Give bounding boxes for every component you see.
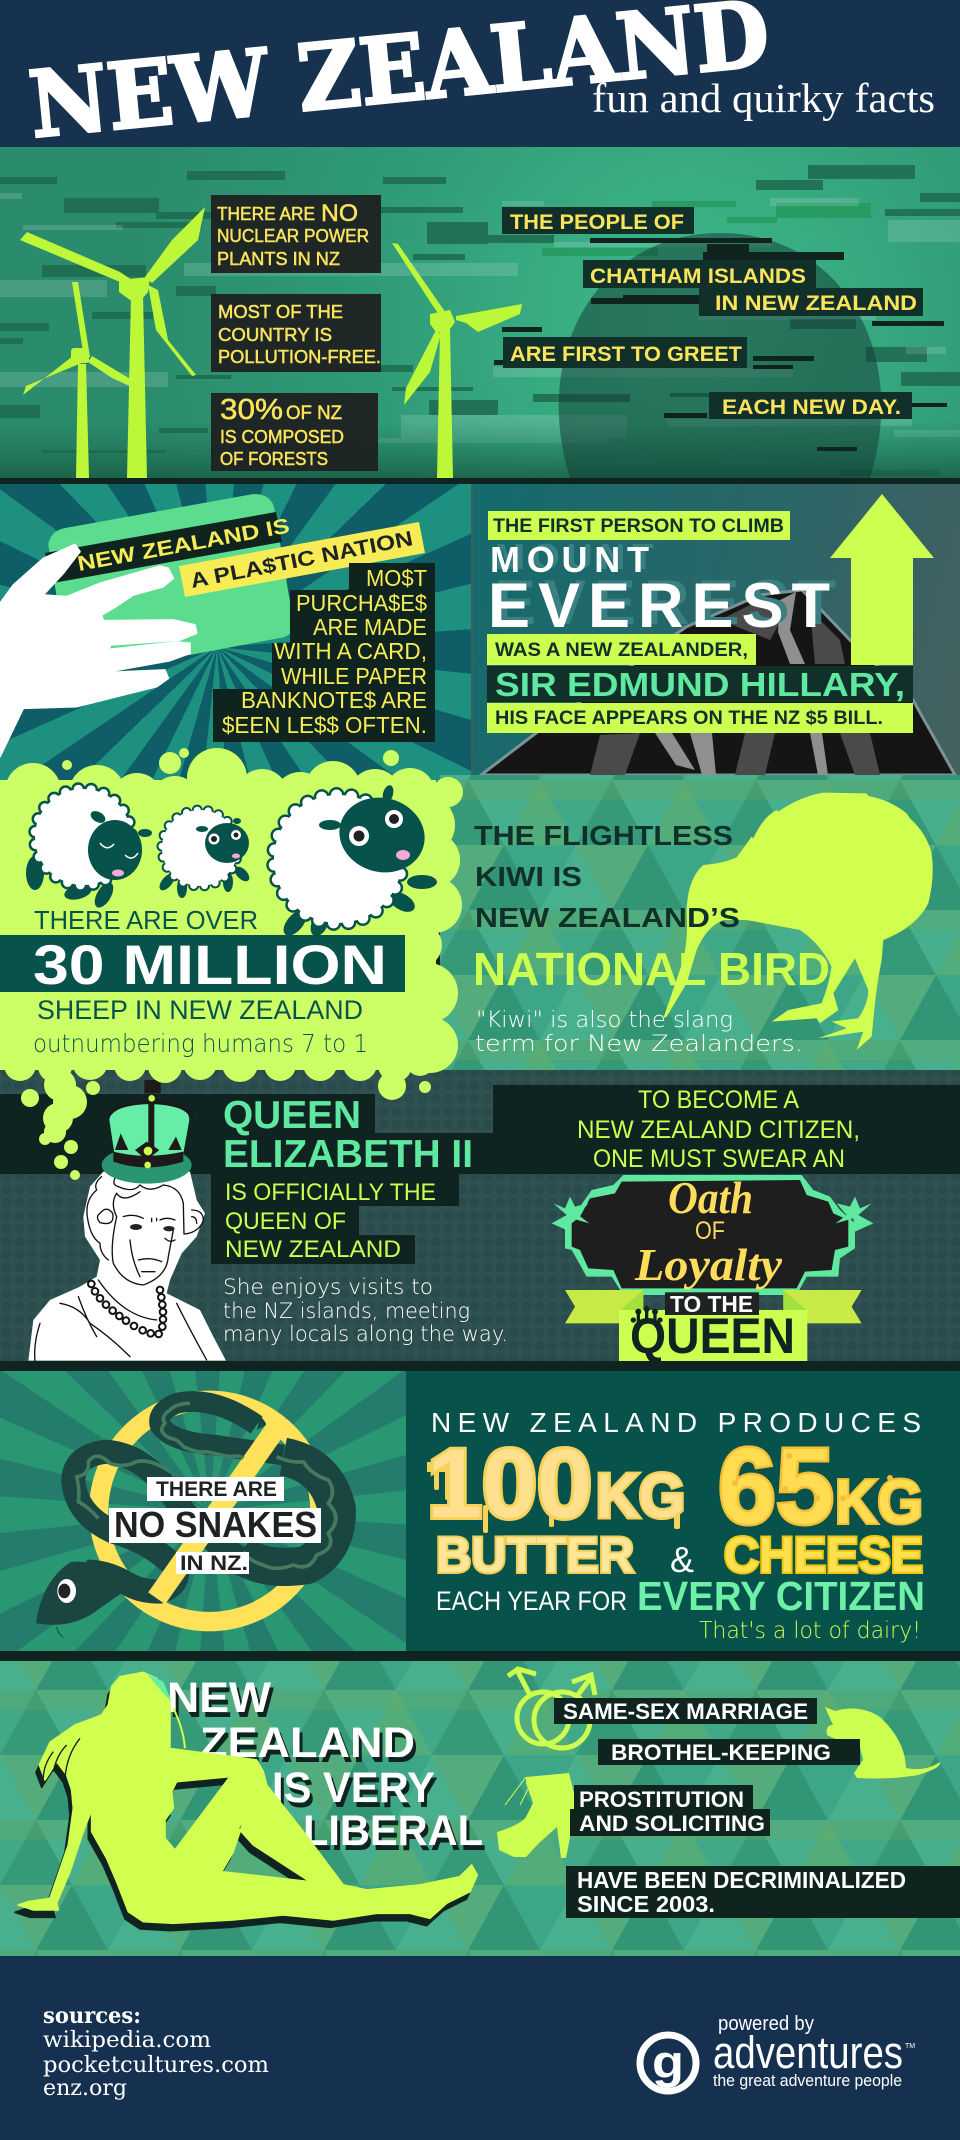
callout: forests: OF FORESTS: [220, 449, 328, 469]
text: officially the queen: QUEEN OF: [225, 1208, 346, 1235]
subtitle: fun and quirky facts: [592, 75, 935, 121]
badge: oath of loyalty: OF: [695, 1217, 725, 1245]
label: in NZ: IN NZ.: [180, 1552, 248, 1575]
panel: no snakes: [0, 1371, 406, 1651]
badge: oath of loyalty: Loyalty: [634, 1239, 783, 1290]
text block: purchases: MO$T: [366, 565, 427, 591]
badge: oath of loyalty: [552, 1172, 873, 1364]
heading: first person to climb: THE FIRST PERSON TO CLIMB: [493, 516, 784, 537]
heading: New Zealand is very liberal: IS VERY: [272, 1764, 435, 1812]
heading: New Zealand is very liberal: LIBERAL: [303, 1807, 483, 1855]
heading: New Zealand is very liberal: ZEALAND: [203, 1724, 418, 1772]
heading: Mount Everest: [488, 536, 836, 641]
text: sources: wikipedia.com: [43, 2028, 211, 2053]
panel: very liberal: [0, 1661, 960, 1956]
panel: kiwi: [440, 775, 960, 1070]
text: sources: sources:: [43, 2003, 141, 2029]
text: sheep in New Zealand: SHEEP IN NEW ZEALAND: [37, 995, 363, 1025]
heading: first person to climb: [488, 511, 790, 540]
heading: New Zealand produces: NEW ZEALAND PRODUCES: [431, 1407, 921, 1438]
callout: forests: OF NZ: [286, 403, 342, 424]
label: prostitution and soliciting: PROSTITUTION: [579, 1787, 744, 1812]
label: butter: BUTTER: [436, 1527, 634, 1583]
label: no snakes: NO SNAKES: [114, 1504, 317, 1545]
callout: no nuclear power: PLANTS IN NZ: [217, 249, 340, 269]
statistic: 100 kg butter: KG: [596, 1462, 685, 1531]
callout: no nuclear power: THERE ARE: [217, 204, 315, 224]
text: New Zealander: [487, 634, 756, 665]
text: visits: She enjoys visits to: [223, 1275, 433, 1299]
text: flightless kiwi: [474, 820, 740, 933]
banner: New Zealand is: NEW ZEALAND IS: [76, 514, 291, 576]
panel: Mount Everest: [471, 484, 960, 775]
callout: no nuclear power: NUCLEAR POWER: [217, 226, 369, 246]
label: cheese: CHEESE: [724, 1527, 923, 1583]
banner: a plastic nation: A PLA$TIC NATION: [189, 527, 415, 593]
text: there are over: THERE ARE OVER: [34, 905, 258, 935]
logo: g adventures: adventures: [713, 2027, 903, 2078]
text: each year for: EACH YEAR FOR: [436, 1586, 627, 1616]
icon: snake: [36, 1402, 337, 1637]
icon: left wind turbine: [23, 282, 132, 478]
text: officially the queen: NEW ZEALAND: [225, 1236, 401, 1263]
callout: pollution free: [211, 294, 381, 372]
text: five dollar bill: [487, 703, 913, 733]
text block: Chatham Islands: THE PEOPLE OF: [510, 211, 684, 234]
text: flightless kiwi: THE FLIGHTLESS: [474, 820, 733, 851]
banner: 30 million: 30 MILLION: [33, 933, 387, 996]
icon: prohibition sign: [99, 1400, 320, 1622]
text: to become a citizen: [577, 1086, 860, 1173]
statistic: 65 kg cheese: KG: [835, 1468, 923, 1537]
text block: purchases: WHILE PAPER: [281, 663, 427, 689]
heading: Queen Elizabeth II: ELIZABETH II: [223, 1133, 473, 1176]
text block: purchases: [213, 563, 435, 742]
text: powered by: powered by: [718, 2013, 814, 2035]
heading: New Zealand is very liberal: LIBERAL: [306, 1812, 486, 1860]
text: officially the queen: IS OFFICIALLY THE: [225, 1179, 436, 1206]
icon: hand: [0, 544, 197, 757]
text block: purchases: $EEN LE$$ OFTEN.: [222, 712, 427, 738]
logo: g adventures: the great adventure people: [713, 2071, 902, 2090]
text: officially the queen: [211, 1174, 459, 1264]
text: outnumbering humans: outnumbering humans 7 to 1: [33, 1029, 368, 1058]
banner: New Zealand is: [45, 512, 291, 583]
text block: Chatham Islands: CHATHAM ISLANDS: [590, 265, 806, 288]
callout: forests: IS COMPOSED: [220, 427, 344, 447]
text block: purchases: ARE MADE: [313, 614, 427, 640]
icon: woman silhouette: [15, 1672, 477, 1931]
text: every citizen: EVERY CITIZEN: [637, 1573, 925, 1619]
heading: national bird: NATIONAL BIRD: [473, 943, 830, 995]
panel: plastic nation: [0, 484, 471, 804]
label: prostitution and soliciting: AND SOLICITING: [579, 1811, 765, 1836]
icon: sheep two: [157, 810, 252, 898]
text: to become a citizen: NEW ZEALAND CITIZEN,: [577, 1116, 860, 1144]
icon: gender symbols and rings: [508, 1669, 595, 1748]
panel: header: [0, 0, 960, 147]
text block: Chatham Islands: [502, 207, 923, 419]
heading: Mount Everest: MOUNT: [495, 536, 654, 577]
text: sources: pocketcultures.com: [43, 2053, 269, 2078]
panel: sheep cloud: [0, 748, 463, 1180]
necklace: [88, 1281, 166, 1337]
heading: New Zealand is very liberal: NEW: [167, 1674, 271, 1722]
ampersand: &: [670, 1539, 694, 1580]
statistic: 65 kg cheese: 65: [718, 1425, 834, 1546]
heading: Mount Everest: MOUNT: [490, 539, 649, 580]
text block: purchases: PURCHA$E$: [296, 590, 427, 616]
label: same-sex marriage: SAME-SEX MARRIAGE: [563, 1699, 808, 1724]
label: brothel-keeping: BROTHEL-KEEPING: [611, 1740, 831, 1765]
heading: Queen Elizabeth II: QUEEN: [223, 1094, 361, 1137]
callout: forests: 30%: [220, 394, 283, 426]
crown: [102, 1080, 193, 1184]
panel: footer: [0, 1956, 960, 2140]
text: visits: [223, 1275, 508, 1346]
heading: New Zealand is very liberal: NEW: [170, 1679, 274, 1727]
heading: Mount Everest: EVEREST: [488, 571, 830, 641]
heading: New Zealand is very liberal: ZEALAND: [200, 1719, 415, 1767]
icon: sheep one: [26, 789, 152, 911]
thought cloud shape: [0, 748, 463, 1180]
icon: large wind turbine: [20, 207, 205, 478]
dark sun: [559, 233, 881, 478]
label: prostitution and soliciting: [570, 1785, 770, 1836]
icon: kiwi bird: [663, 793, 933, 1050]
heading: Queen Elizabeth II: [223, 1094, 473, 1176]
text: decriminalized: SINCE 2003.: [577, 1891, 715, 1917]
callout: forests: [211, 393, 378, 471]
text: to become a citizen: ONE MUST SWEAR AN: [593, 1145, 845, 1173]
callout: pollution free: POLLUTION-FREE.: [218, 347, 381, 367]
statistic: 65 kg cheese: [718, 1425, 923, 1546]
icon: cat: [825, 1707, 940, 1779]
callout: no nuclear power: NO: [321, 200, 358, 227]
badge: oath of loyalty: Oath: [668, 1172, 753, 1223]
text: Kiwi slang: "Kiwi" is also the slang: [476, 1008, 733, 1033]
logo: g adventures: g: [652, 2036, 684, 2088]
icon: credit card: [48, 494, 294, 657]
text block: Chatham Islands: IN NEW ZEALAND: [715, 292, 917, 315]
icon: up arrow: [830, 494, 934, 665]
text: sources: [43, 2003, 269, 2101]
text: flightless kiwi: NEW ZEALAND’S: [475, 902, 740, 933]
text block: purchases: BANKNOTE$ ARE: [241, 687, 427, 713]
heading: New Zealand is very liberal: [167, 1674, 486, 1860]
statistic: 100 kg butter: 100: [427, 1429, 592, 1538]
text: visits: many locals along the way.: [223, 1322, 508, 1346]
statistic: 100 kg butter: [427, 1429, 685, 1538]
panel: butter and cheese: [406, 1371, 960, 1651]
text: sources: enz.org: [43, 2076, 127, 2101]
callout: no nuclear power: [211, 195, 381, 273]
panel: queen and oath: [0, 1070, 960, 1361]
heading: New Zealand is very liberal: IS VERY: [275, 1769, 438, 1817]
badge: oath of loyalty: TO THE: [670, 1291, 753, 1317]
text: Kiwi slang: term for New Zealanders.: [475, 1032, 803, 1057]
label: there are: THERE ARE: [156, 1478, 277, 1501]
banner: a plastic nation: [179, 522, 425, 597]
text: visits: the NZ islands, meeting: [223, 1299, 470, 1323]
logo: g adventures: [640, 2027, 915, 2091]
icon: sheep three: [274, 784, 437, 940]
panel: wind power and Chatham Islands: [0, 147, 960, 484]
text: decriminalized: HAVE BEEN DECRIMINALIZED: [577, 1867, 906, 1893]
text block: purchases: WITH A CARD,: [274, 638, 427, 664]
text block: Chatham Islands: EACH NEW DAY.: [722, 396, 901, 419]
text: Sir Edmund Hillary: SIR EDMUND HILLARY,: [495, 666, 905, 703]
text: to become a citizen: TO BECOME A: [638, 1086, 799, 1114]
icon: right wind turbine: [392, 243, 522, 478]
icon: mountain: [481, 590, 955, 775]
heading: Mount Everest: EVEREST: [494, 568, 836, 638]
callout: pollution free: MOST OF THE: [218, 302, 343, 322]
illustration: queen portrait: [28, 1080, 226, 1361]
text: decriminalized: [566, 1866, 960, 1918]
icon: high heel shoe: [497, 1773, 575, 1858]
text: a lot of dairy: That's a lot of dairy!: [699, 1618, 921, 1644]
logo: g adventures: TM: [905, 2043, 915, 2050]
text: flightless kiwi: KIWI IS: [475, 861, 582, 892]
text: New Zealander: WAS A NEW ZEALANDER,: [495, 640, 748, 661]
text block: Chatham Islands: ARE FIRST TO GREET: [510, 343, 742, 366]
text: Kiwi slang: [475, 1008, 803, 1057]
callout: pollution free: COUNTRY IS: [218, 325, 332, 345]
text: five dollar bill: HIS FACE APPEARS ON THE NZ $5 BILL.: [495, 708, 883, 729]
